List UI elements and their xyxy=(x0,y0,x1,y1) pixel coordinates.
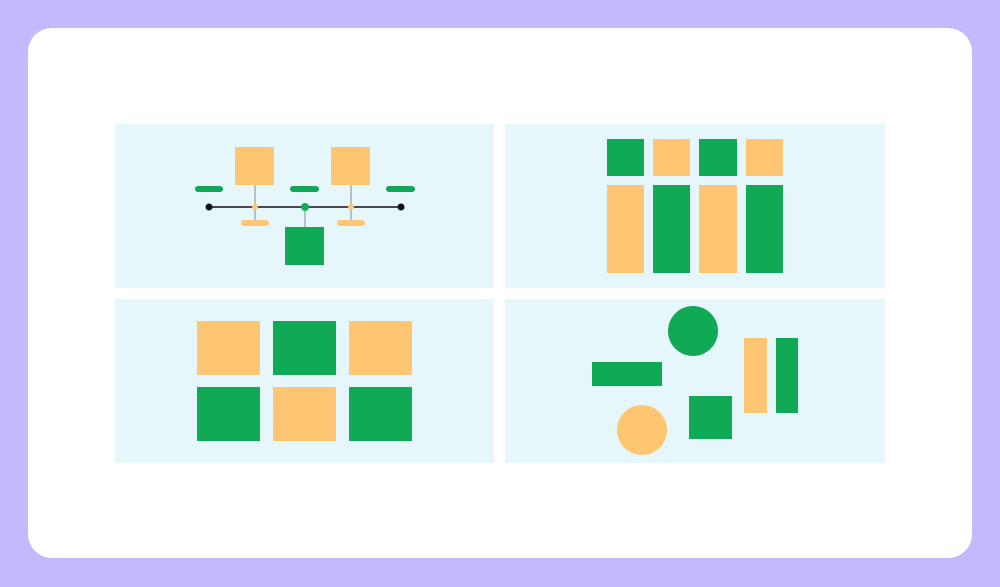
panel: grid xyxy=(115,299,494,463)
panel: shapes xyxy=(505,299,885,463)
panel: timeline xyxy=(115,124,494,288)
panel: columns xyxy=(505,124,885,288)
